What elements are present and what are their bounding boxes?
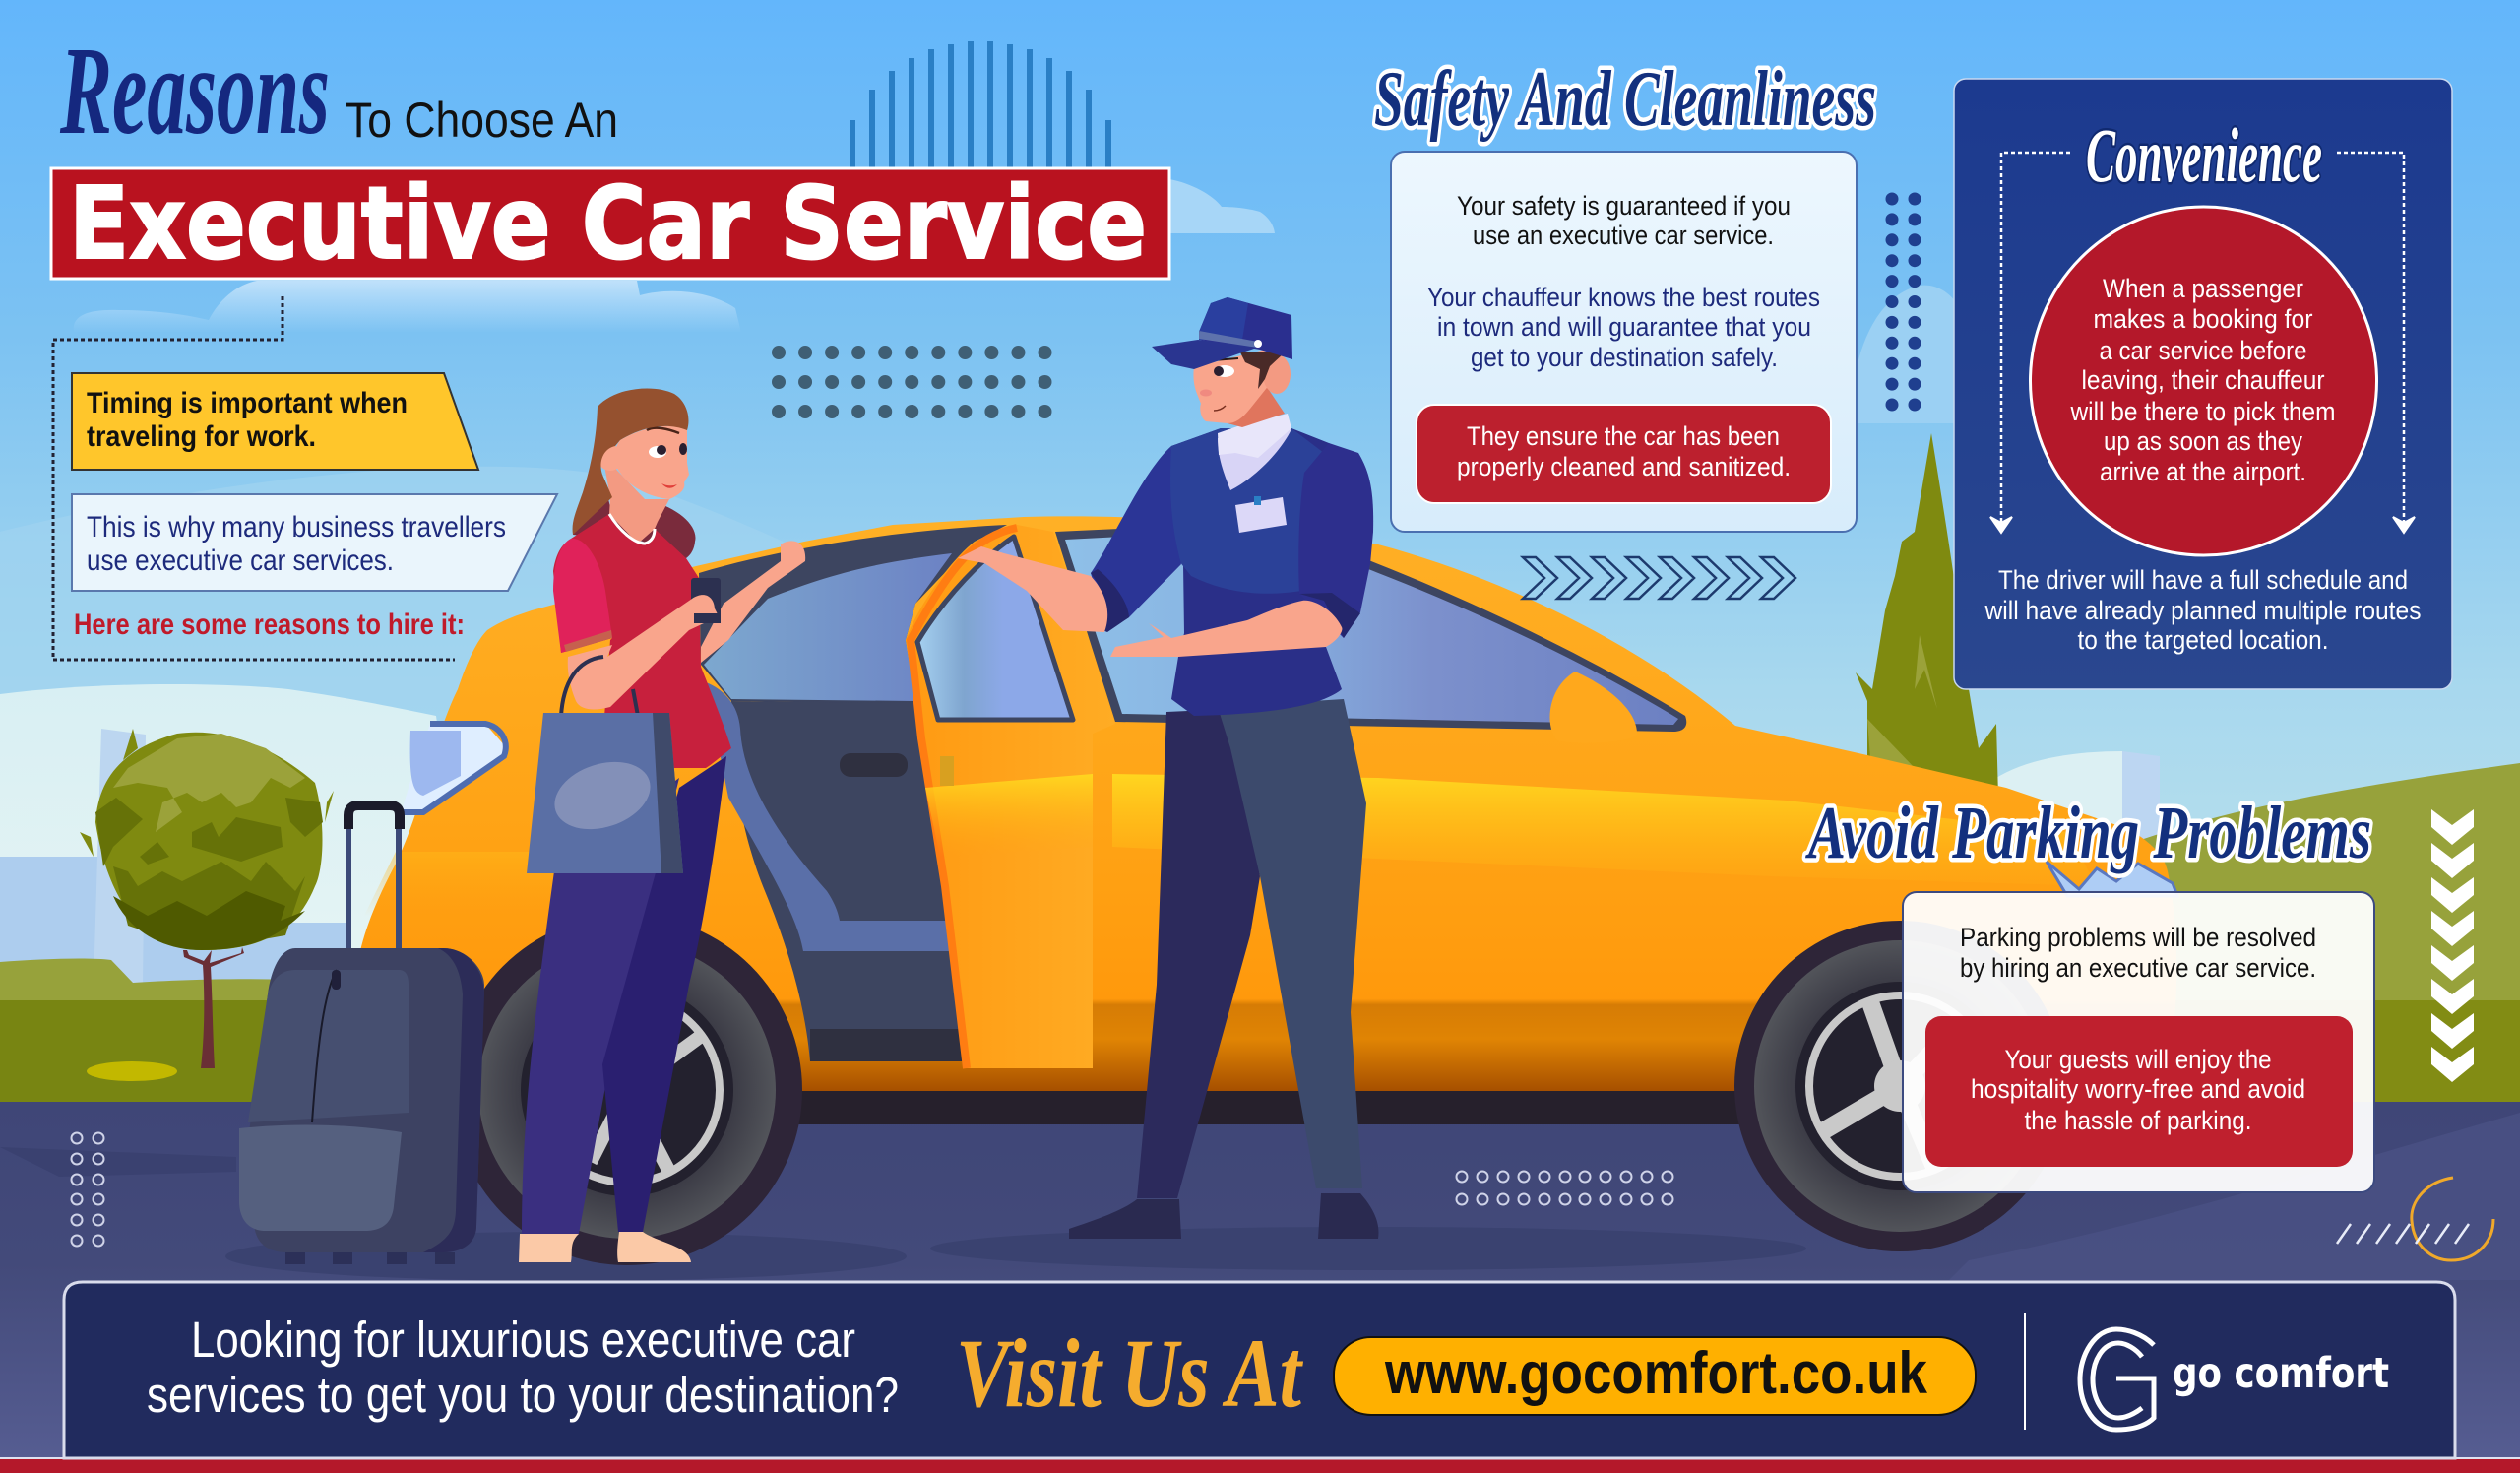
arm holding phone <box>568 595 719 709</box>
vest upper <box>1168 428 1324 594</box>
headlight <box>2047 862 2177 896</box>
white callout: use executive car services. <box>87 544 394 577</box>
name badge <box>1235 496 1287 533</box>
dark dot grid <box>779 352 1048 412</box>
red note: Your guests will enjoy the <box>2004 1045 2272 1074</box>
red note: hospitality worry-free and avoid <box>1971 1074 2305 1104</box>
red note: properly cleaned and sanitized. <box>1457 452 1791 481</box>
red note: They ensure the car has been <box>1467 421 1780 451</box>
rear wheel <box>478 941 776 1239</box>
yellow highlights <box>364 774 2097 916</box>
car <box>351 516 2177 1265</box>
door window <box>917 537 1073 720</box>
footer question <box>147 1312 899 1423</box>
heading: convenience: Convenience <box>2086 112 2322 198</box>
road <box>0 1102 2520 1461</box>
footer strip <box>0 1282 2520 1473</box>
face <box>1193 350 1291 423</box>
left cuff <box>1091 569 1129 632</box>
convenience text: will have already planned multiple routes <box>1984 596 2422 625</box>
red circle: When a passenger <box>2103 274 2303 303</box>
cloud right <box>1169 179 1275 233</box>
accent arc and hatches <box>2337 1178 2493 1260</box>
title <box>51 21 1169 283</box>
trousers right leg <box>1218 699 1366 1188</box>
dashed arrows <box>2001 153 2404 527</box>
reasons lead-in: Here are some reasons to hire it: <box>74 608 465 641</box>
hills left <box>0 959 295 1014</box>
left sleeve <box>1091 446 1181 630</box>
yellow callout <box>72 373 478 470</box>
back hair <box>573 475 696 558</box>
torso <box>1171 428 1358 716</box>
chauffeur <box>958 297 1378 1239</box>
trousers left leg <box>1137 709 1260 1198</box>
front side window <box>1055 527 1686 732</box>
white chevrons down <box>2431 809 2474 1082</box>
small ring grid left <box>71 1132 104 1247</box>
phone <box>691 578 721 623</box>
logo: go comfort <box>2173 1349 2389 1398</box>
intro callout group <box>53 296 557 660</box>
neck <box>1228 387 1285 427</box>
red circle: leaving, their chauffeur <box>2081 365 2325 395</box>
small ring rows centre <box>1457 1172 1673 1205</box>
panel: safety: Your safety is guaranteed if you <box>1457 191 1791 221</box>
panel: safety: Your chauffeur knows the best routes <box>1427 283 1820 312</box>
panel: convenience <box>1954 79 2452 689</box>
yellow callout: traveling for work. <box>87 420 316 453</box>
shirt <box>553 514 731 768</box>
title: Reasons <box>59 21 330 160</box>
red circle <box>2030 207 2376 555</box>
door opening interior <box>706 682 968 1061</box>
footer question: Looking for luxurious executive car <box>191 1312 855 1368</box>
red circle: up as soon as they <box>2104 426 2302 456</box>
left forearm <box>958 546 1107 632</box>
right forearm and hand <box>1110 601 1342 657</box>
tail light <box>401 724 507 814</box>
red circle: makes a booking for <box>2093 304 2313 334</box>
collar <box>1218 414 1292 458</box>
chevron row arrows <box>1523 557 1796 599</box>
panel: parking <box>1903 892 2374 1192</box>
shoes <box>1069 1193 1378 1239</box>
left bush tree <box>80 729 334 1081</box>
cloud behind panels <box>1851 286 1984 423</box>
red circle: a car service before <box>2099 336 2307 365</box>
tall tree right <box>1856 433 1998 798</box>
bag <box>527 657 683 873</box>
side mirror <box>1550 672 1637 743</box>
suitcase <box>239 805 484 1264</box>
red note: the hassle of parking. <box>2024 1106 2252 1135</box>
feet <box>519 1232 691 1262</box>
face <box>598 426 689 499</box>
front wheel <box>1754 940 2046 1232</box>
convenience text: to the targeted location. <box>2077 625 2329 655</box>
red circle: will be there to pick them <box>2070 397 2335 426</box>
wheel arches <box>452 915 802 1265</box>
url pill: www.gocomfort.co.uk <box>1384 1340 1928 1406</box>
car body <box>351 516 2176 1091</box>
footer bar <box>64 1282 2455 1458</box>
woman <box>519 388 805 1262</box>
white callout: This is why many business travellers <box>87 511 506 544</box>
rear window <box>699 525 1007 704</box>
raised forearm <box>701 541 805 663</box>
neck <box>602 455 669 544</box>
panel: safety <box>1391 152 1857 532</box>
legs <box>522 778 679 1234</box>
yellow callout: Timing is important when <box>87 387 408 419</box>
convenience text: The driver will have a full schedule and <box>1998 565 2408 595</box>
necklace <box>609 514 655 544</box>
vertical dots <box>1892 199 1915 409</box>
blue striped semicircle <box>852 41 1108 169</box>
hills right <box>2116 763 2520 1014</box>
panel: parking: Parking problems will be resolved <box>1960 923 2316 952</box>
red note <box>1925 1016 2353 1167</box>
title banner: Executive Car Service <box>69 165 1147 283</box>
panel: parking: by hiring an executive car service. <box>1960 953 2316 983</box>
underbody <box>768 1091 1742 1124</box>
heading: safety and cleanliness: Safety And Cleanliness <box>1374 56 1876 143</box>
hair <box>573 388 688 535</box>
cloud left <box>74 281 741 333</box>
visit us: Visit Us At <box>956 1318 1304 1428</box>
footer question: services to get you to your destination? <box>147 1367 899 1423</box>
panel: safety: in town and will guarantee that you <box>1437 312 1811 342</box>
shirt V neck <box>1218 429 1292 490</box>
logo <box>2080 1329 2389 1430</box>
cap <box>1152 297 1292 369</box>
convenience text <box>1984 565 2422 655</box>
red circle: arrive at the airport. <box>2100 457 2306 486</box>
open door <box>906 525 1115 1068</box>
white callout <box>72 494 557 591</box>
panel: safety: use an executive car service. <box>1473 221 1774 250</box>
red note <box>1417 405 1831 503</box>
panel: safety: get to your destination safely. <box>1471 343 1778 372</box>
right cuff <box>1299 593 1360 638</box>
title: To Choose An <box>346 93 618 148</box>
right sleeve <box>1298 443 1373 638</box>
